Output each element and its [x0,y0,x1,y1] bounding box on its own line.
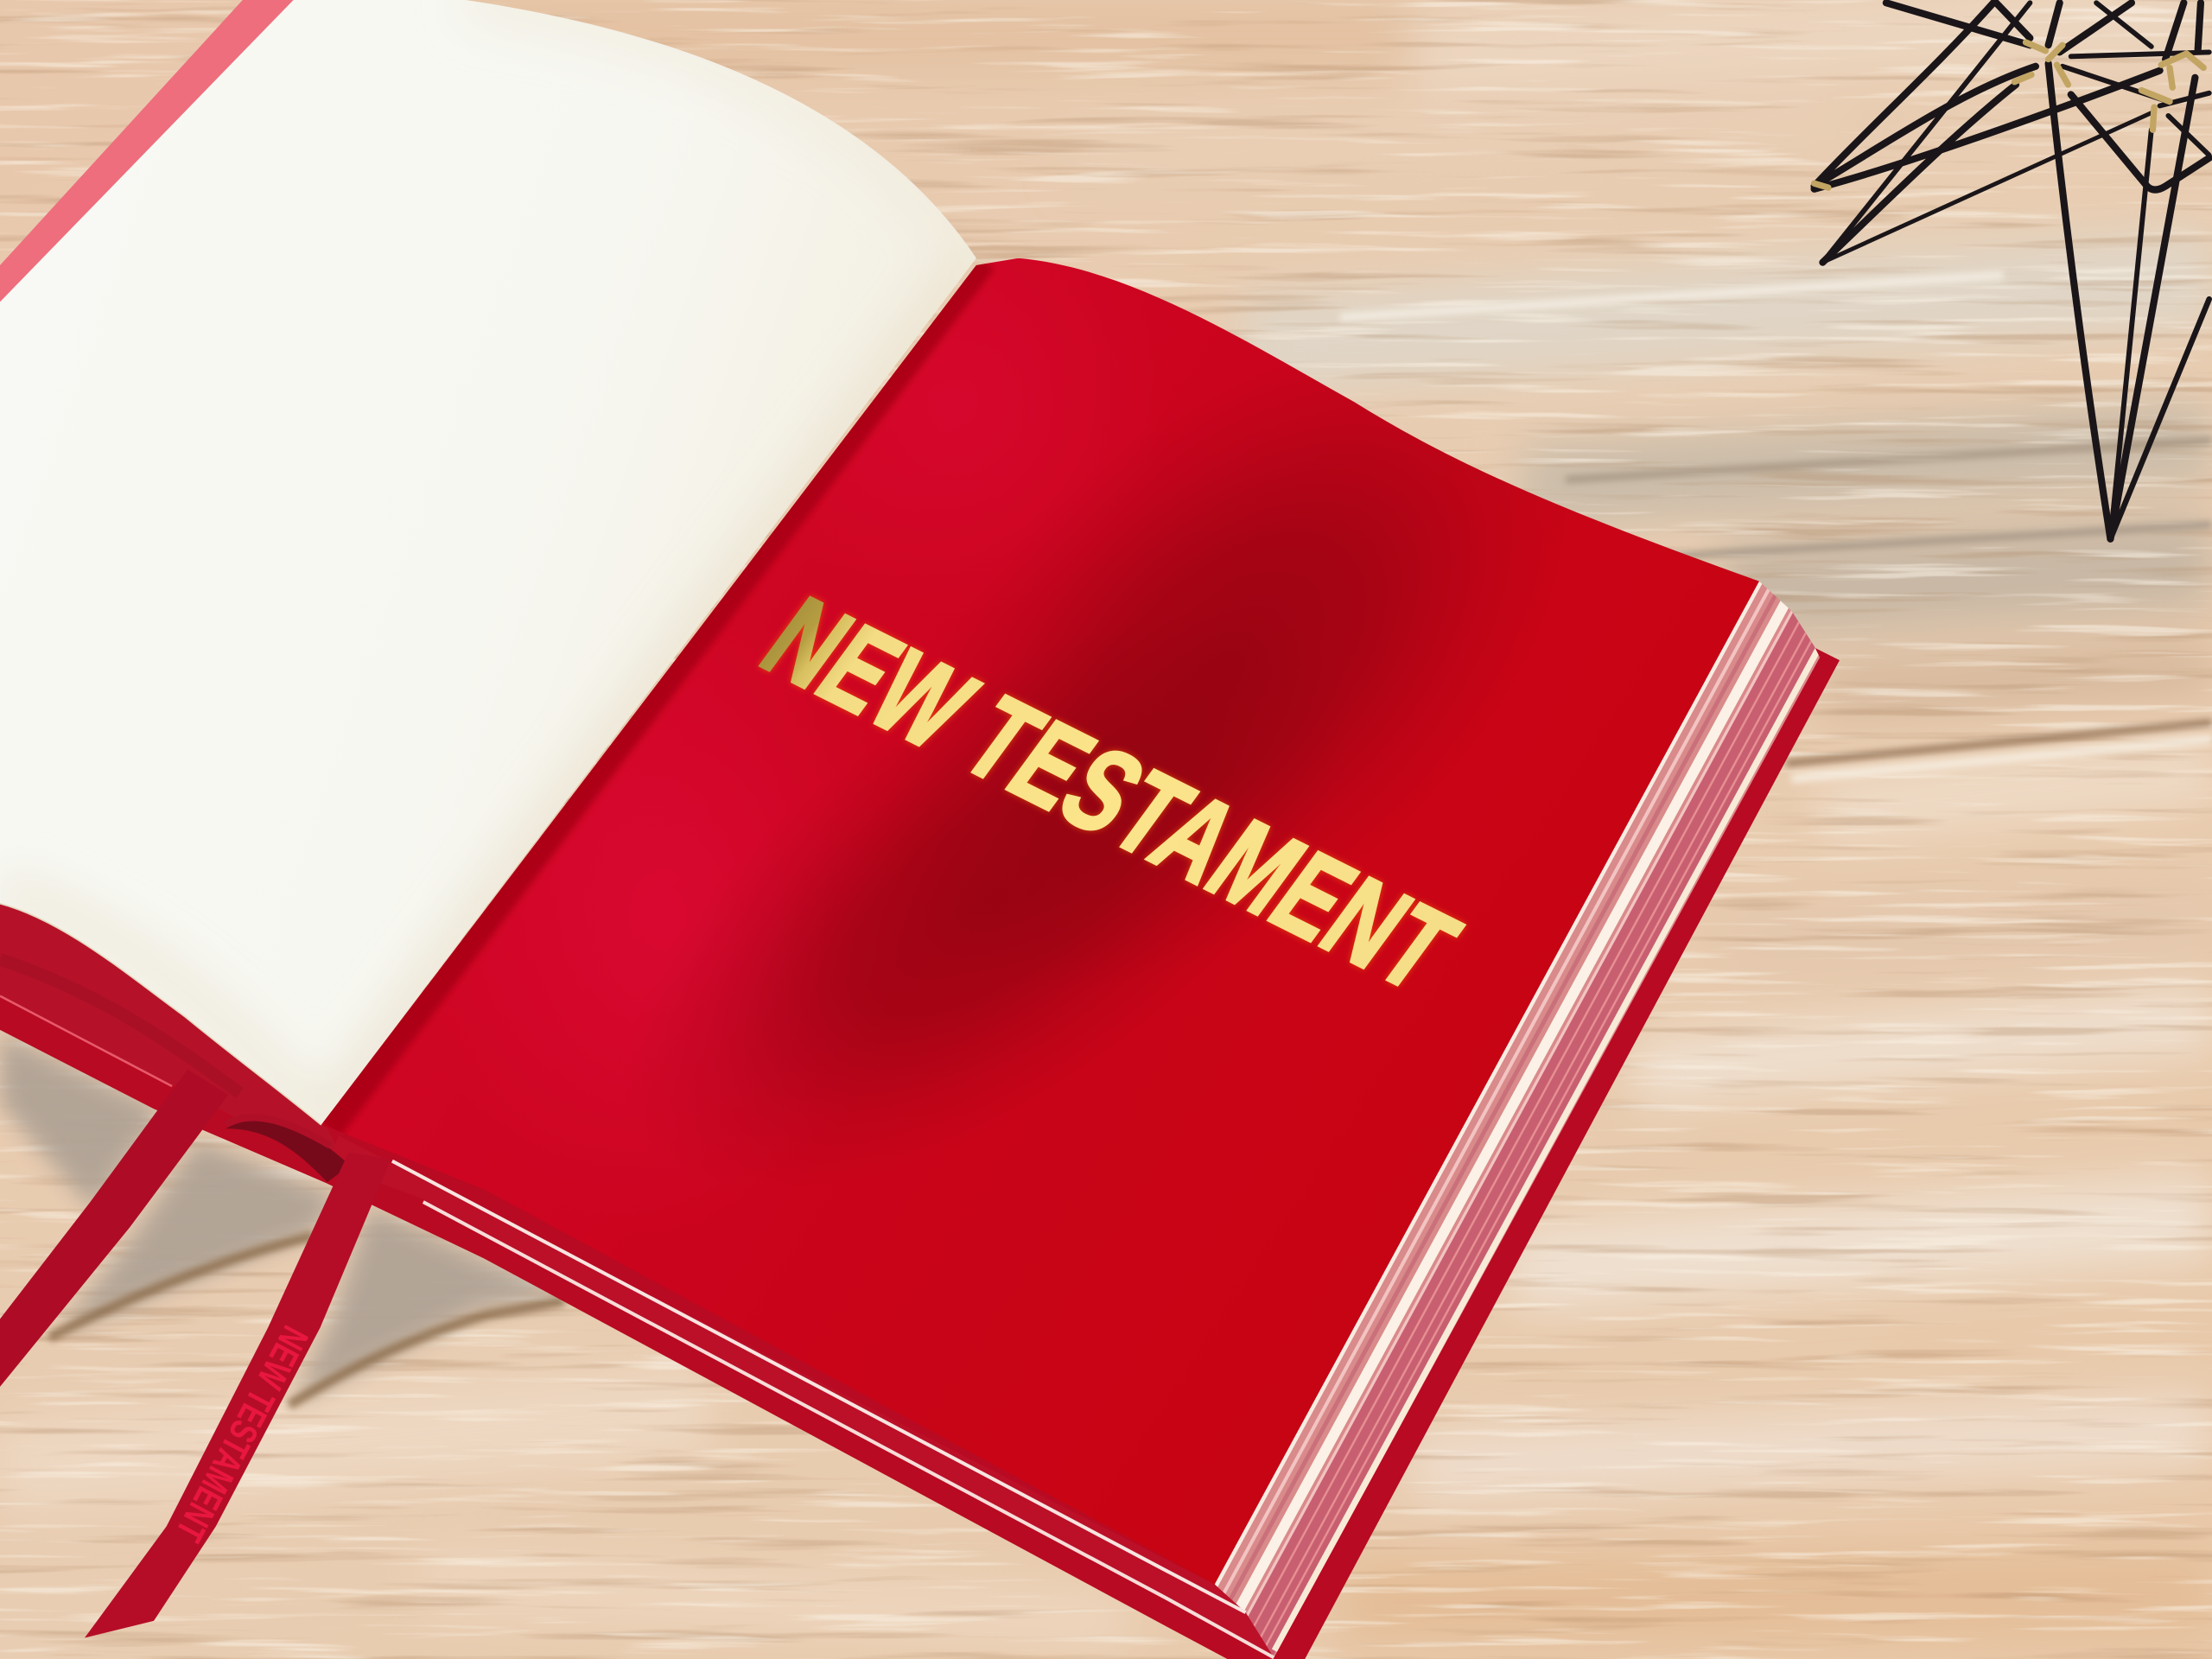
right page: solid red [321,198,1759,1584]
ribbon bookmark: with lettering [85,1153,391,1638]
page edge stack on the right [1215,582,1820,1657]
page stack bottom edge [327,1135,1274,1657]
page lighting: dark sheen across the center [327,198,1692,1307]
left page stack edge: red block [0,903,353,1178]
ribbon bookmark: with lettering: NEW TESTAMENT [168,1319,316,1548]
gold joints [1815,42,2203,188]
left page: blank white [0,0,976,1124]
gold foil title: NEW TESTAMENT [740,573,1482,1015]
book cover: red hardcover [0,646,1840,1659]
ribbon link across spine [226,1117,350,1182]
decoration: black wire star with gold joints [1815,3,2209,539]
shadows on the table under book and ribbons [0,1033,578,1405]
pink page edge top-left [0,0,296,305]
ribbon bookmark: left [0,1070,228,1387]
